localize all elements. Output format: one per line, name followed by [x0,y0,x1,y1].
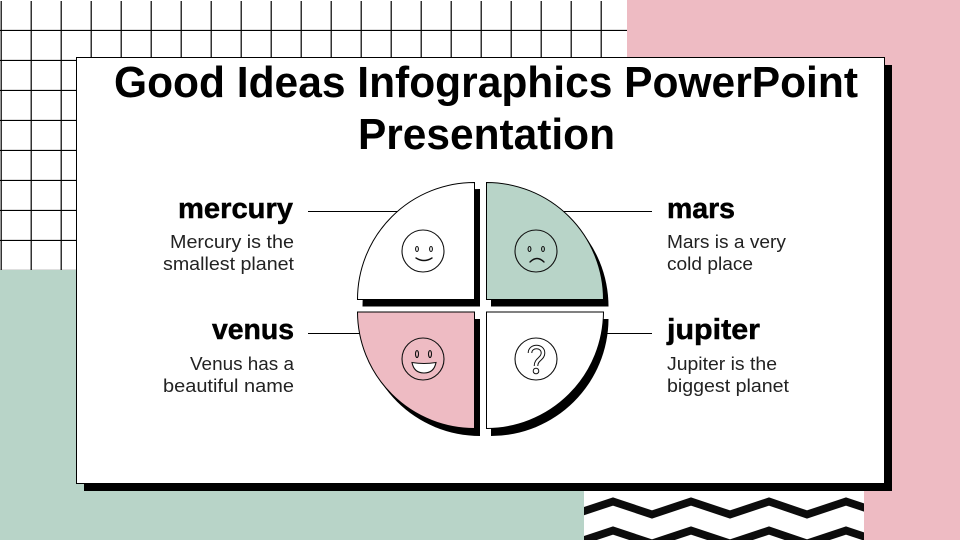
connector: venus [308,332,362,334]
pie quadrant: mars [486,182,608,306]
text block: mercury: smallest planet [163,254,294,274]
connector: mars [560,210,652,212]
text block: venus [163,314,295,396]
text block: mars [667,193,786,274]
text block: venus: venus [212,314,294,346]
title: Presentation [358,110,615,159]
background: pink block [627,0,960,540]
background: grid pattern [0,1,627,270]
text block: jupiter: Jupiter is the [667,354,777,374]
text block: jupiter: jupiter [666,314,760,346]
text block: mars: Mars is a very [667,232,786,252]
text block: jupiter [666,314,789,396]
title: Good Ideas Infographics PowerPoint [114,58,858,107]
text block: jupiter: biggest planet [667,376,789,396]
card panel [76,58,884,484]
text block: mercury [163,193,294,274]
text block: mars: cold place [667,254,753,274]
icon: laughing face [402,338,444,380]
icon: question mark [515,338,557,380]
text block: mercury: Mercury is the [170,232,294,252]
icon: smiling face [402,230,444,272]
pie quadrant: venus [358,312,480,436]
text block: venus: Venus has a [190,354,295,374]
background: zigzag panel [574,491,885,540]
icon: sad face [515,230,557,272]
text block: venus: beautiful name [163,376,294,396]
text block: mercury: mercury [178,193,293,225]
text block: mars: mars [667,193,735,225]
connector: mercury [308,210,400,212]
pie quadrant: mercury [358,182,480,306]
pie quadrant: jupiter [486,312,608,436]
title [114,58,858,159]
card shadow [84,65,892,491]
connector: jupiter [600,332,652,334]
background: green block [0,270,584,540]
